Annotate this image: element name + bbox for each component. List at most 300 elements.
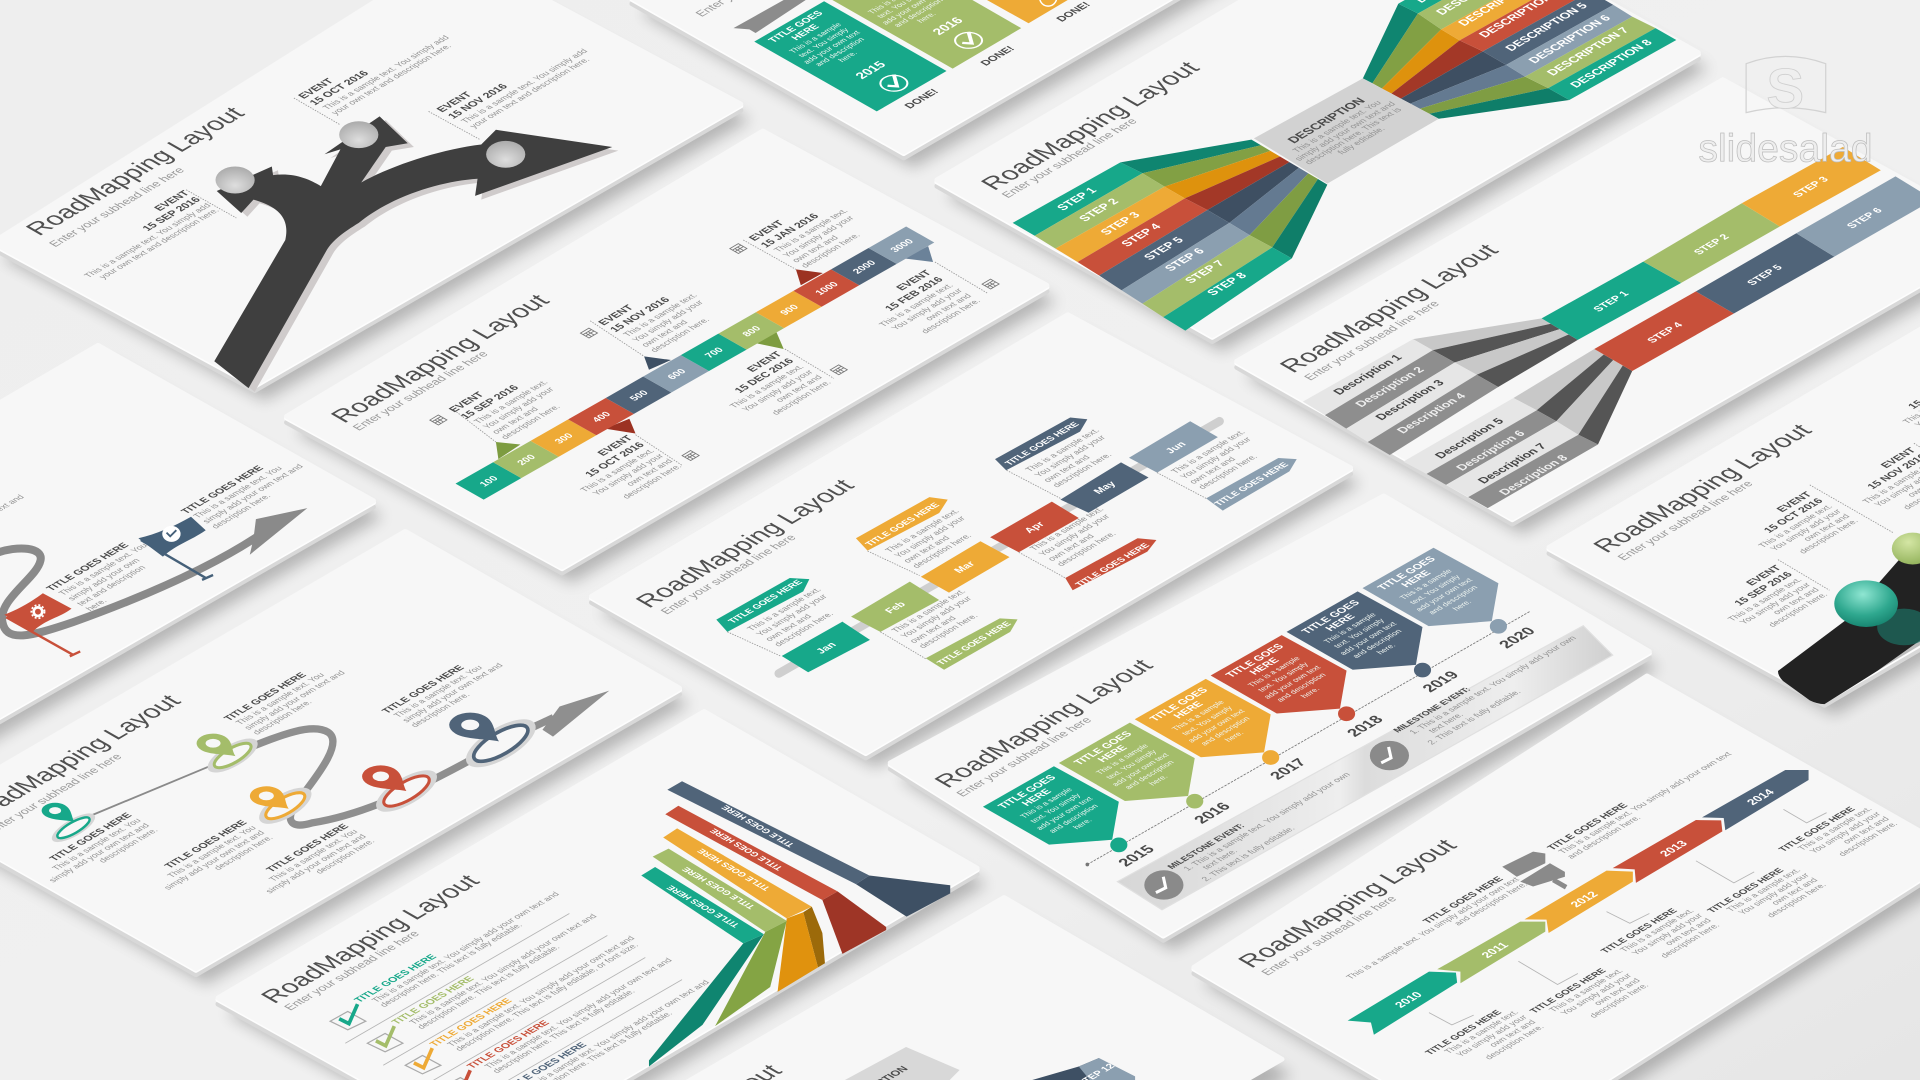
milestone card orange bbox=[987, 0, 1068, 23]
text: upper title block two: simply add your own text and bbox=[400, 661, 505, 724]
ribbon arrows: 2013 bbox=[1657, 839, 1691, 858]
checklist row teal: description here. This text is fully editable. bbox=[377, 922, 524, 1008]
watermark: slidesalad logo: slidesalad bbox=[1698, 128, 1873, 171]
text: lower blocks: own text and bbox=[1840, 815, 1891, 845]
text: event 15 sep: EVENT bbox=[152, 189, 192, 213]
text: event 15 jan: own text and bbox=[789, 234, 841, 264]
year labels: 2016 bbox=[1191, 800, 1235, 826]
checklist row green bbox=[367, 907, 607, 1052]
folded ribbons bbox=[641, 781, 950, 1067]
description box: simply add your own text and bbox=[1292, 100, 1398, 162]
pentagon cards: TITLE GOES bbox=[1300, 599, 1363, 636]
text: lower title block three: TITLE GOES HERE bbox=[264, 823, 352, 874]
text: event 15 feb: 15 FEB 2016 bbox=[882, 275, 946, 313]
title: RoadMapping Layout bbox=[255, 871, 486, 1007]
text: event 15 sep: You simply add your bbox=[480, 386, 556, 430]
icon: three way road arrow bbox=[214, 116, 618, 392]
pentagon cards: TITLE GOES bbox=[1376, 555, 1439, 592]
pentagon cards: This is a sample bbox=[1094, 742, 1151, 776]
checklist row teal: TITLE GOES HERE bbox=[352, 953, 440, 1004]
milestone card 2015: and description bbox=[813, 36, 866, 68]
month blocks: Jun bbox=[1164, 440, 1189, 455]
text: event 15 jan: This is a sample text. bbox=[771, 207, 850, 254]
pentagon cards: HERE bbox=[1096, 744, 1130, 764]
panel: black road slide bbox=[1549, 263, 1920, 705]
icons: calendars bbox=[430, 244, 999, 460]
icon: curved road arrow bbox=[0, 508, 307, 635]
panel: monthly roadmap slide bbox=[591, 315, 1351, 758]
milestone bar: MILESTONE EVENT: bbox=[1391, 686, 1473, 734]
left step bands: STEP 1 bbox=[1054, 185, 1100, 212]
text: body blocks: own text and bbox=[1187, 455, 1238, 485]
pentagon cards: here. bbox=[1375, 642, 1398, 656]
watermark: slidesalad logo: S bbox=[1767, 57, 1804, 120]
text: lower blocks: You simply add your bbox=[1807, 810, 1883, 855]
text: title block one: This is a sample text. You bbox=[56, 542, 150, 597]
month blocks: Jan bbox=[814, 641, 839, 656]
watermark: slidesalad logo bbox=[1698, 56, 1873, 171]
subtitle: Enter your subhead line here bbox=[658, 533, 800, 616]
text: event 15 jan: EVENT bbox=[746, 219, 787, 243]
text: body blocks: This is a sample text. bbox=[889, 588, 968, 634]
text: body blocks: description here. bbox=[1050, 451, 1114, 489]
text: event 15 dec: EVENT bbox=[744, 350, 785, 374]
milestone card 2016: here. bbox=[915, 11, 938, 24]
text: event 15 nov: your own text and description here. bbox=[467, 56, 592, 130]
text: lower blocks: description here. bbox=[1482, 1023, 1546, 1061]
text: body blocks: own text and bbox=[763, 613, 814, 643]
panel: yearly roadmap slide bbox=[890, 496, 1649, 940]
text: event 15 sep: own text and bbox=[1770, 586, 1821, 616]
pentagon cards: This is a sample bbox=[1398, 567, 1455, 601]
text: upper title block one: description here. bbox=[250, 698, 314, 736]
text: upper title block two: description here. bbox=[408, 691, 472, 729]
title: RoadMapping Layout bbox=[20, 103, 251, 239]
description box: DESCRIPTION bbox=[1284, 96, 1368, 145]
text: event 15 sep: description here. bbox=[1766, 591, 1830, 628]
text: upper title block one: This is a sample text. You bbox=[233, 671, 327, 726]
description bars: Description 3 bbox=[1373, 378, 1448, 422]
text: event 15 dec: description here. bbox=[769, 379, 833, 416]
subtitle: Enter your subhead line here bbox=[46, 165, 188, 249]
pentagon cards: TITLE GOES bbox=[1148, 686, 1211, 723]
right description bands: DESCRIPTION 6 bbox=[1526, 13, 1614, 65]
text: title block two: TITLE GOES HERE bbox=[179, 464, 266, 516]
right description bands: DESCRIPTION 5 bbox=[1503, 1, 1591, 53]
text: title block one: here. bbox=[83, 597, 109, 612]
text: event 15 sep: 15 SEP 2016 bbox=[458, 383, 522, 421]
panel: folded ribbons slide bbox=[218, 711, 977, 1080]
title banners: TITLE GOES HERE bbox=[1212, 461, 1291, 507]
checklist row red: description here. This text is fully editable. bbox=[490, 988, 637, 1074]
description box: fully editable. bbox=[1335, 125, 1387, 156]
text: lower title block three: simply add your own text and bbox=[263, 833, 368, 895]
month blocks: Feb bbox=[883, 600, 909, 615]
checklist row green: This is a sample text. You simply add your own text and bbox=[407, 912, 599, 1026]
text: event 15 nov: 15 NOV 2016 bbox=[445, 82, 511, 121]
checklist row red: This is a sample text. You simply add your own text and bbox=[482, 956, 674, 1070]
pentagon cards: here. bbox=[1071, 817, 1094, 831]
text: lower blocks: own text and bbox=[1662, 917, 1713, 947]
pentagon cards: This is a sample bbox=[1322, 611, 1379, 645]
text: lower title block three: description here. bbox=[313, 838, 377, 875]
title banners: TITLE GOES HERE bbox=[935, 620, 1013, 666]
text: body blocks bbox=[745, 427, 1275, 650]
title: RoadMapping Layout bbox=[630, 476, 861, 612]
text: lower blocks: TITLE GOES HERE bbox=[1705, 867, 1786, 914]
text: event 15 jan: You simply add your bbox=[780, 214, 856, 259]
checklist row orange: TITLE GOES HERE bbox=[428, 997, 515, 1048]
text: upper left block: and description here. bbox=[1451, 881, 1530, 927]
text: event 15 oct: 15 OCT 2016 bbox=[1761, 497, 1826, 535]
text: event 15 sep: EVENT bbox=[446, 390, 487, 414]
milestone card 2015: text. You simply bbox=[796, 26, 851, 59]
timeline band: 900 bbox=[778, 303, 802, 317]
title: RoadMapping Layout bbox=[975, 58, 1206, 194]
text: lower blocks: TITLE GOES HERE bbox=[1528, 967, 1608, 1015]
left step bands: STEP 6 bbox=[1162, 246, 1208, 273]
milestone bar: 1. This is a sample text. You simply add your own bbox=[1181, 771, 1353, 872]
pentagon cards bbox=[983, 548, 1498, 845]
pentagon cards: here. bbox=[1450, 598, 1474, 612]
step blocks: STEP 6 bbox=[1845, 207, 1885, 230]
description bars bbox=[1303, 339, 1598, 508]
text: event 15 nov: EVENT bbox=[596, 303, 636, 327]
text: lower blocks: You simply add your bbox=[1454, 1013, 1529, 1058]
milestone bar: 2. This text is fully editable. bbox=[1199, 825, 1297, 883]
done labels: DONE! bbox=[978, 44, 1018, 68]
checklist row orange: description here. This text is fully editable, or font size. bbox=[453, 942, 641, 1052]
timeline band: 500 bbox=[628, 389, 652, 403]
pentagon cards: add your own text bbox=[1034, 795, 1096, 831]
pentagon cards: add your own text bbox=[1262, 664, 1323, 700]
left step bands: STEP 7 bbox=[1182, 259, 1228, 285]
text: lower blocks: You simply add your bbox=[1629, 912, 1705, 956]
timeline band: 800 bbox=[740, 324, 764, 338]
text: body blocks: This is a sample text. bbox=[745, 586, 823, 632]
timeline band: 600 bbox=[665, 367, 689, 381]
pentagon cards: add your own text bbox=[1413, 576, 1475, 613]
pentagon cards: This is a sample bbox=[1246, 655, 1303, 688]
text: event 15 feb: own text and bbox=[922, 292, 974, 322]
text: lower title block two: description here. bbox=[211, 834, 275, 871]
description bars: Description 1 bbox=[1331, 353, 1406, 397]
text: body blocks: You simply add your bbox=[1178, 435, 1253, 480]
text: event 15 sep: You simply add your bbox=[1737, 581, 1813, 626]
month blocks: Apr bbox=[1022, 520, 1047, 535]
text: lower blocks: TITLE GOES HERE bbox=[1599, 907, 1679, 955]
pentagon cards: and description bbox=[1350, 628, 1404, 659]
done labels: DONE! bbox=[902, 87, 942, 111]
text: event 15 oct: EVENT bbox=[595, 434, 636, 458]
text: event 15 oct: You simply add your bbox=[1768, 507, 1843, 552]
text: title block two: description here. bbox=[209, 492, 273, 530]
text: lower blocks: TITLE GOES HERE bbox=[1423, 1009, 1504, 1056]
step blocks: STEP 3 bbox=[1791, 175, 1832, 199]
steps fragment bbox=[1032, 1058, 1135, 1080]
timeline band: 300 bbox=[553, 432, 577, 446]
text: body blocks: description here. bbox=[772, 610, 836, 648]
text: event 15 nov: You simply add your bbox=[630, 299, 705, 343]
title: RoadMapping Layout bbox=[929, 656, 1159, 792]
icon: red pin bbox=[354, 761, 443, 820]
text: event 15 feb: description here. bbox=[919, 297, 983, 335]
year labels: 2015 bbox=[1115, 843, 1159, 869]
text: event 15 sep: your own text and description here. bbox=[96, 207, 221, 280]
icon: orange pin bbox=[243, 780, 317, 831]
pentagon cards: here. bbox=[1223, 730, 1246, 743]
pentagon cards: HERE bbox=[1248, 656, 1282, 677]
left fan of coloured strips bbox=[1120, 140, 1327, 258]
description box bbox=[1254, 78, 1439, 184]
text: event 15 nov: This is a sample text. bbox=[621, 292, 699, 338]
text: title block one: simply add your own bbox=[65, 557, 142, 602]
text: lower blocks: This is a sample text. bbox=[1546, 967, 1625, 1013]
text: event 15 jan: 15 JAN 2016 bbox=[758, 212, 822, 249]
year labels bbox=[1115, 625, 1540, 869]
icon: winding road arrow bbox=[73, 691, 609, 825]
milestone card 2015: add your own text bbox=[801, 29, 863, 65]
text: title block two: simply add your own text and bbox=[200, 463, 305, 525]
pentagon cards: This is a sample bbox=[1170, 699, 1227, 732]
left step bands: STEP 3 bbox=[1098, 210, 1144, 237]
text: lower blocks: This is a sample text. bbox=[1724, 867, 1803, 913]
right description bands bbox=[1398, 0, 1676, 100]
checklist row orange: This is a sample text. You simply add your own text and bbox=[445, 934, 637, 1048]
pentagon cards: here. bbox=[1299, 686, 1322, 699]
text: upper title block two: This is a sample text. You bbox=[391, 664, 485, 719]
month blocks: Mar bbox=[952, 560, 978, 575]
folded ribbons: TITLE GOES HERE bbox=[719, 804, 797, 849]
checklist row green: TITLE GOES HERE bbox=[390, 975, 477, 1026]
text: body blocks: You simply add your bbox=[892, 514, 967, 559]
milestone bar: text here. bbox=[1200, 847, 1240, 871]
text: event 15 sep: This is a sample text. bbox=[471, 379, 550, 425]
panel: done milestones slide bbox=[632, 0, 1224, 158]
text: body blocks: This is a sample text. bbox=[883, 507, 961, 554]
folded ribbons: TITLE GOES HERE bbox=[664, 884, 742, 929]
step blocks: STEP 5 bbox=[1745, 264, 1786, 287]
pentagon cards: text. You simply bbox=[1104, 748, 1159, 781]
left step bands bbox=[1013, 162, 1292, 331]
pentagon cards: TITLE GOES bbox=[996, 774, 1059, 811]
text: event 15 oct: description here. bbox=[1796, 517, 1860, 555]
grey fan lower bbox=[1513, 349, 1632, 444]
pentagon cards: text. You simply bbox=[1408, 573, 1462, 606]
subtitle: Enter your subhead line here bbox=[1259, 894, 1400, 977]
icon: red flag bbox=[4, 593, 80, 656]
icon: green pin bbox=[190, 730, 263, 779]
text: lower title block two: simply add your own text and bbox=[161, 829, 267, 891]
checklist row red: TITLE GOES HERE bbox=[465, 1019, 552, 1070]
text: upper right block: and description here. bbox=[1564, 814, 1643, 860]
text: lower blocks: This is a sample text. bbox=[1442, 1009, 1521, 1055]
text: title block two: This is a sample text. You bbox=[191, 464, 284, 520]
text: event 15 nov: description here. bbox=[648, 316, 712, 354]
milestone bar bbox=[1117, 626, 1613, 910]
text: event 15 feb: You simply add your bbox=[889, 287, 965, 331]
panel: location pins road slide bbox=[0, 531, 680, 975]
icon: teal pin bbox=[36, 799, 99, 847]
icon: navy pin bbox=[441, 708, 543, 777]
ribbon arrows bbox=[1348, 770, 1809, 1035]
subtitle: Enter your subhead line here bbox=[282, 929, 423, 1012]
text: lower title block three: This is a sample text. You bbox=[266, 828, 360, 883]
text: lower blocks: You simply add your bbox=[1558, 972, 1634, 1016]
text: title block one: text and description bbox=[74, 564, 148, 607]
text: event 15 sep: 15 SEP 2016 bbox=[140, 195, 204, 233]
timeline band: 1000 bbox=[813, 280, 842, 297]
text: event 15 dec: 15 DEC 2016 bbox=[732, 357, 797, 395]
description bars: Description 6 bbox=[1454, 428, 1529, 473]
pentagon cards: and description bbox=[1426, 584, 1480, 616]
text: lower blocks: description here. bbox=[1836, 820, 1900, 858]
done labels: DONE! bbox=[1054, 0, 1094, 24]
year labels: 2019 bbox=[1419, 669, 1463, 695]
icon: black road with spheres bbox=[1778, 533, 1920, 704]
title: RoadMapping Layout bbox=[1274, 240, 1505, 376]
pentagon cards: HERE bbox=[1020, 788, 1054, 808]
text: event 15 oct: own text and bbox=[624, 457, 675, 487]
title banners bbox=[716, 418, 1297, 670]
text: lower blocks bbox=[1423, 800, 1900, 1076]
pentagon cards: text. You simply bbox=[1028, 792, 1083, 824]
description box: description here. This text is bbox=[1302, 106, 1404, 166]
step blocks: STEP 1 bbox=[1592, 290, 1632, 314]
text: upper title block one: TITLE GOES HERE bbox=[222, 671, 309, 723]
text: event 15 feb: This is a sample text. bbox=[877, 282, 955, 328]
timeline band bbox=[456, 227, 934, 500]
banner bbox=[733, 0, 806, 33]
pentagon cards: text. You simply bbox=[1180, 705, 1235, 737]
text: event 15 oct: 15 OCT 2016 bbox=[583, 441, 647, 479]
folded ribbons: TITLE GOES HERE bbox=[707, 827, 785, 872]
text: event 15 oct: This is a sample text. You simply add bbox=[320, 34, 451, 111]
title: RoadMapping Layout bbox=[1232, 836, 1463, 972]
milestone card 2015: 2015 bbox=[852, 59, 889, 81]
milestone bar: MILESTONE EVENT: bbox=[1165, 822, 1247, 870]
ribbon arrows: 2012 bbox=[1568, 889, 1602, 909]
pentagon cards: HERE bbox=[1324, 613, 1358, 633]
text: event 15 nov: This is a sample text. You simply add bbox=[459, 47, 590, 125]
ribbon arrows: 2011 bbox=[1479, 940, 1512, 960]
text: event 15 oct: This is a sample text. bbox=[578, 447, 657, 493]
title: RoadMapping Layout bbox=[325, 291, 556, 427]
text: body blocks: description here. bbox=[1054, 530, 1118, 568]
milestone card 2015: here. bbox=[836, 50, 859, 63]
text: event 15 sep: This is a sample text. bbox=[1725, 576, 1804, 623]
pentagon cards: and description bbox=[1047, 803, 1100, 834]
text: event 15 jan: description here. bbox=[798, 232, 862, 269]
text: event 15 oct: own text and bbox=[1801, 512, 1852, 542]
text: event 15 oct: This is a sample text. bbox=[1756, 503, 1835, 549]
icon: navy flag bbox=[138, 517, 213, 580]
title banners: TITLE GOES HERE bbox=[863, 501, 942, 548]
left step bands: STEP 5 bbox=[1141, 235, 1187, 262]
timeline band: 400 bbox=[590, 410, 614, 424]
text: body blocks: description here. bbox=[1196, 453, 1260, 490]
text: lower blocks: This is a sample text. bbox=[1617, 907, 1696, 953]
text: event 15 dec: own text and bbox=[773, 373, 824, 403]
pentagon cards: This is a sample bbox=[1018, 786, 1075, 820]
description bars: Description 2 bbox=[1353, 365, 1428, 409]
subtitle: Enter your subhead line here bbox=[954, 715, 1095, 799]
pentagon cards: add your own text bbox=[1110, 751, 1172, 788]
text: body blocks: You simply add your bbox=[754, 593, 829, 637]
description bars: Description 5 bbox=[1432, 416, 1507, 460]
text: lower title block one: TITLE GOES HERE bbox=[48, 812, 135, 863]
pentagon cards: add your own text bbox=[1186, 708, 1247, 744]
subtitle: Enter your subhead line here bbox=[1615, 479, 1757, 562]
grey fan upper bbox=[1413, 318, 1578, 387]
subtitle: Enter your subhead line here bbox=[999, 116, 1141, 200]
text: body blocks: own text and bbox=[901, 534, 952, 564]
milestone card 2015 bbox=[754, 1, 947, 111]
pentagon cards: HERE bbox=[1172, 700, 1206, 720]
text: lower blocks: description here. bbox=[1587, 982, 1651, 1019]
checklist row orange bbox=[405, 929, 645, 1074]
done labels bbox=[902, 0, 1094, 111]
text: lower blocks: This is a sample text. bbox=[1795, 805, 1874, 852]
description bars: Description 4 bbox=[1394, 391, 1469, 435]
panel: number timeline slide bbox=[287, 131, 1047, 573]
folded ribbons: TITLE GOES HERE bbox=[680, 866, 757, 910]
text: lower title block two: This is a sample text. You bbox=[165, 824, 258, 879]
text: body blocks: own text and bbox=[907, 614, 958, 644]
title banners: TITLE GOES HERE bbox=[1073, 542, 1152, 588]
text: event 15 sep: EVENT bbox=[1744, 564, 1784, 588]
pentagon cards: add your own text bbox=[1338, 620, 1399, 656]
ribbon arrows: 2014 bbox=[1744, 787, 1778, 807]
text: event 15 nov: EVENT bbox=[1878, 446, 1919, 470]
title banners: TITLE GOES HERE bbox=[1002, 420, 1081, 467]
text: body blocks: You simply add your bbox=[1036, 513, 1112, 557]
folded ribbons: TITLE GOES HERE bbox=[695, 847, 773, 892]
text: lower blocks: description here. bbox=[1764, 881, 1828, 919]
timeline band: 3000 bbox=[888, 237, 917, 254]
text: event 15 sep: own text and bbox=[489, 405, 541, 435]
month blocks: May bbox=[1092, 480, 1119, 496]
text: event 15 oct: EVENT bbox=[1774, 490, 1815, 514]
milestone card 2015: This is a sample bbox=[787, 21, 844, 55]
text: event 15 nov: EVENT bbox=[434, 90, 475, 114]
pentagon cards: HERE bbox=[1400, 569, 1434, 589]
left step bands: STEP 2 bbox=[1076, 196, 1122, 223]
timeline band: 700 bbox=[703, 346, 727, 360]
description box bbox=[839, 1047, 960, 1080]
milestone bar: text here. bbox=[1426, 711, 1466, 734]
year labels: 2018 bbox=[1343, 713, 1388, 739]
text: event 15 feb: EVENT bbox=[894, 269, 934, 292]
text: lower blocks: You simply add your bbox=[1736, 871, 1811, 916]
month blocks bbox=[782, 421, 1218, 672]
text: lower blocks: own text and bbox=[1487, 1018, 1538, 1048]
right fan of coloured strips bbox=[1363, 4, 1569, 119]
text: upper title block one: simply add your own text and bbox=[242, 669, 347, 731]
pentagon cards: text. You simply bbox=[1332, 617, 1386, 649]
checklist row teal: This is a sample text. You simply add your own text and bbox=[369, 890, 562, 1004]
description bars: Description 8 bbox=[1496, 453, 1571, 497]
text: upper right block: TITLE GOES HERE bbox=[1545, 802, 1631, 852]
year labels: 2017 bbox=[1267, 756, 1311, 782]
right description bands: DESCRIPTION 7 bbox=[1544, 26, 1632, 77]
text: event 15 sep: This is a sample text. You simply add bbox=[82, 202, 213, 279]
description box: This is a sample text. You bbox=[1290, 99, 1384, 154]
text: event 15 oct: 15 OCT 2016 bbox=[307, 69, 372, 107]
panel: ribbon years slide bbox=[1194, 676, 1920, 1080]
milestone card 2016 bbox=[830, 0, 1021, 69]
timeline band: 2000 bbox=[851, 259, 879, 276]
